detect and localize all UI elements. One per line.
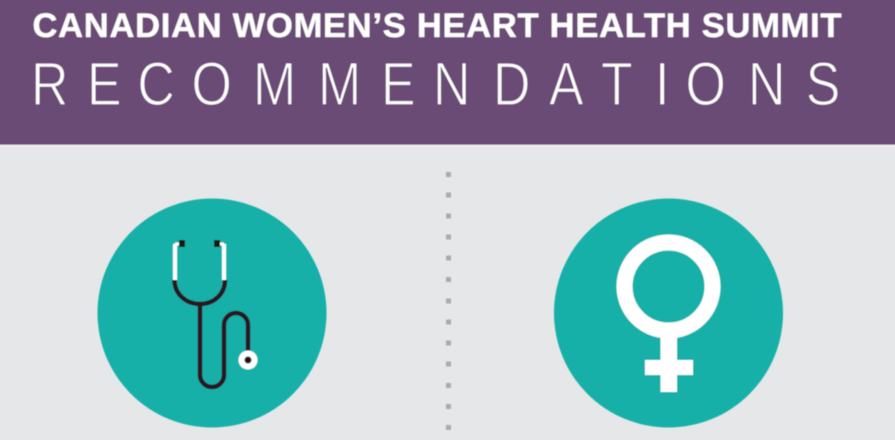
subtitle: Recommendations: RECOMMENDATIONS <box>31 50 840 118</box>
icon: female symbol in teal circle <box>554 198 783 428</box>
header banner <box>0 0 895 144</box>
icon: stethoscope in teal circle <box>98 198 326 428</box>
title: Canadian Women's Heart Health Summit: CANADIAN WOMEN’S HEART HEALTH SUMMIT <box>32 7 842 45</box>
dotted vertical divider <box>446 172 451 430</box>
